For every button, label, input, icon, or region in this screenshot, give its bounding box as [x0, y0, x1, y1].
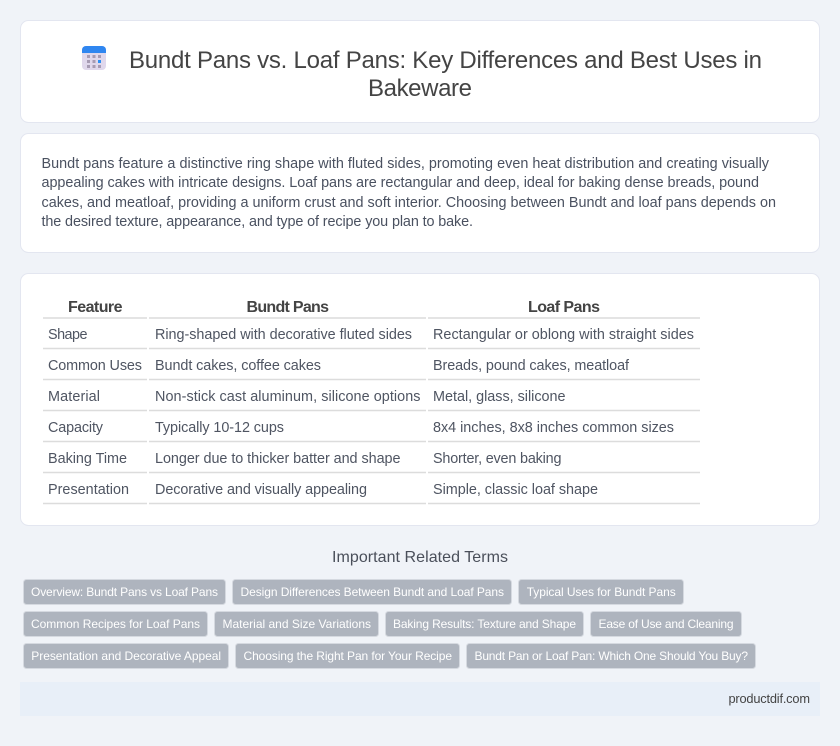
- table header row: Loaf Pans: [528, 299, 600, 316]
- tag: [590, 612, 742, 636]
- table row: baking time: Baking Time: [48, 451, 127, 467]
- panel: comparison table: [20, 274, 820, 526]
- tag: Design Differences Between Bundt and Loaf Pans: [240, 585, 504, 599]
- table header row: [43, 299, 700, 318]
- table row: material: Metal, glass, silicone: [433, 389, 566, 405]
- footer source text: productdif.com: [728, 691, 810, 706]
- heading: related terms: Important Related Terms: [332, 549, 508, 566]
- related terms tags: [24, 580, 756, 668]
- table row: capacity: Typically 10-12 cups: [155, 420, 284, 436]
- table row: presentation: [43, 482, 700, 504]
- table row: capacity: [43, 420, 700, 442]
- table row: baking time: Shorter, even baking: [433, 451, 562, 467]
- title: Bundt Pans vs. Loaf Pans: Key Differences and Best Uses in: [129, 47, 762, 74]
- tag: Common Recipes for Loaf Pans: [31, 617, 200, 631]
- table row: shape: Rectangular or oblong with straight sides: [433, 327, 694, 343]
- table row: capacity: 8x4 inches, 8x8 inches common sizes: [433, 420, 674, 436]
- tag: Presentation and Decorative Appeal: [31, 649, 221, 663]
- text block: introduction paragraph: cakes, and meatloaf, providing a uniform crust and soft interior. Choosing between Bundt and loaf pans depends on: [42, 195, 776, 211]
- tag: Baking Results: Texture and Shape: [393, 617, 576, 631]
- table header row: Bundt Pans: [246, 299, 329, 316]
- tag: [214, 612, 378, 636]
- tag: Ease of Use and Cleaning: [598, 617, 734, 631]
- table row: baking time: [43, 451, 700, 472]
- table row: baking time: Longer due to thicker batter and shape: [155, 451, 400, 467]
- table header row: Feature: [68, 299, 123, 316]
- table row: common uses: Common Uses: [48, 358, 142, 374]
- table row: capacity: Capacity: [48, 420, 104, 436]
- table row: material: [43, 389, 700, 410]
- table row: common uses: [43, 358, 700, 380]
- title: Bakeware: [368, 75, 472, 102]
- tag: Bundt Pan or Loaf Pan: Which One Should You Buy?: [474, 649, 748, 663]
- tag: [24, 580, 226, 604]
- table row: common uses: Bundt cakes, coffee cakes: [155, 358, 321, 374]
- footer: [20, 682, 820, 716]
- tag: [236, 644, 460, 668]
- tag: [466, 644, 756, 668]
- table row: shape: Shape: [48, 327, 88, 343]
- tag: Overview: Bundt Pans vs Loaf Pans: [31, 585, 218, 599]
- table row: presentation: Simple, classic loaf shape: [433, 482, 598, 498]
- table row: material: Non-stick cast aluminum, silicone options: [155, 389, 420, 405]
- text block: introduction paragraph: Bundt pans feature a distinctive ring shape with fluted sides, promoting even heat distribution and creating visually: [42, 156, 770, 172]
- table row: common uses: Breads, pound cakes, meatloaf: [433, 358, 630, 374]
- tag: [232, 580, 512, 604]
- table row: material: Material: [48, 389, 100, 405]
- text block: introduction paragraph: appealing cakes with intricate designs. Loaf pans are rectangular and deep, ideal for baking dense breads, pound: [42, 175, 759, 191]
- text block: introduction paragraph: the desired texture, appearance, and type of recipe you plan to bake.: [42, 214, 473, 230]
- tag: [24, 644, 228, 668]
- tag: Choosing the Right Pan for Your Recipe: [244, 649, 452, 663]
- table row: shape: Ring-shaped with decorative fluted sides: [155, 327, 412, 343]
- table row: presentation: Decorative and visually appealing: [155, 482, 367, 498]
- icon: calendar: [82, 46, 106, 70]
- tag: [386, 612, 584, 636]
- table row: presentation: Presentation: [48, 482, 129, 498]
- table row: shape: [43, 327, 700, 348]
- tag: [518, 580, 684, 604]
- tag: [24, 612, 208, 636]
- tag: Material and Size Variations: [222, 617, 371, 631]
- panel: header: [20, 20, 820, 122]
- tag: Typical Uses for Bundt Pans: [527, 585, 676, 599]
- panel: introduction: [20, 134, 820, 252]
